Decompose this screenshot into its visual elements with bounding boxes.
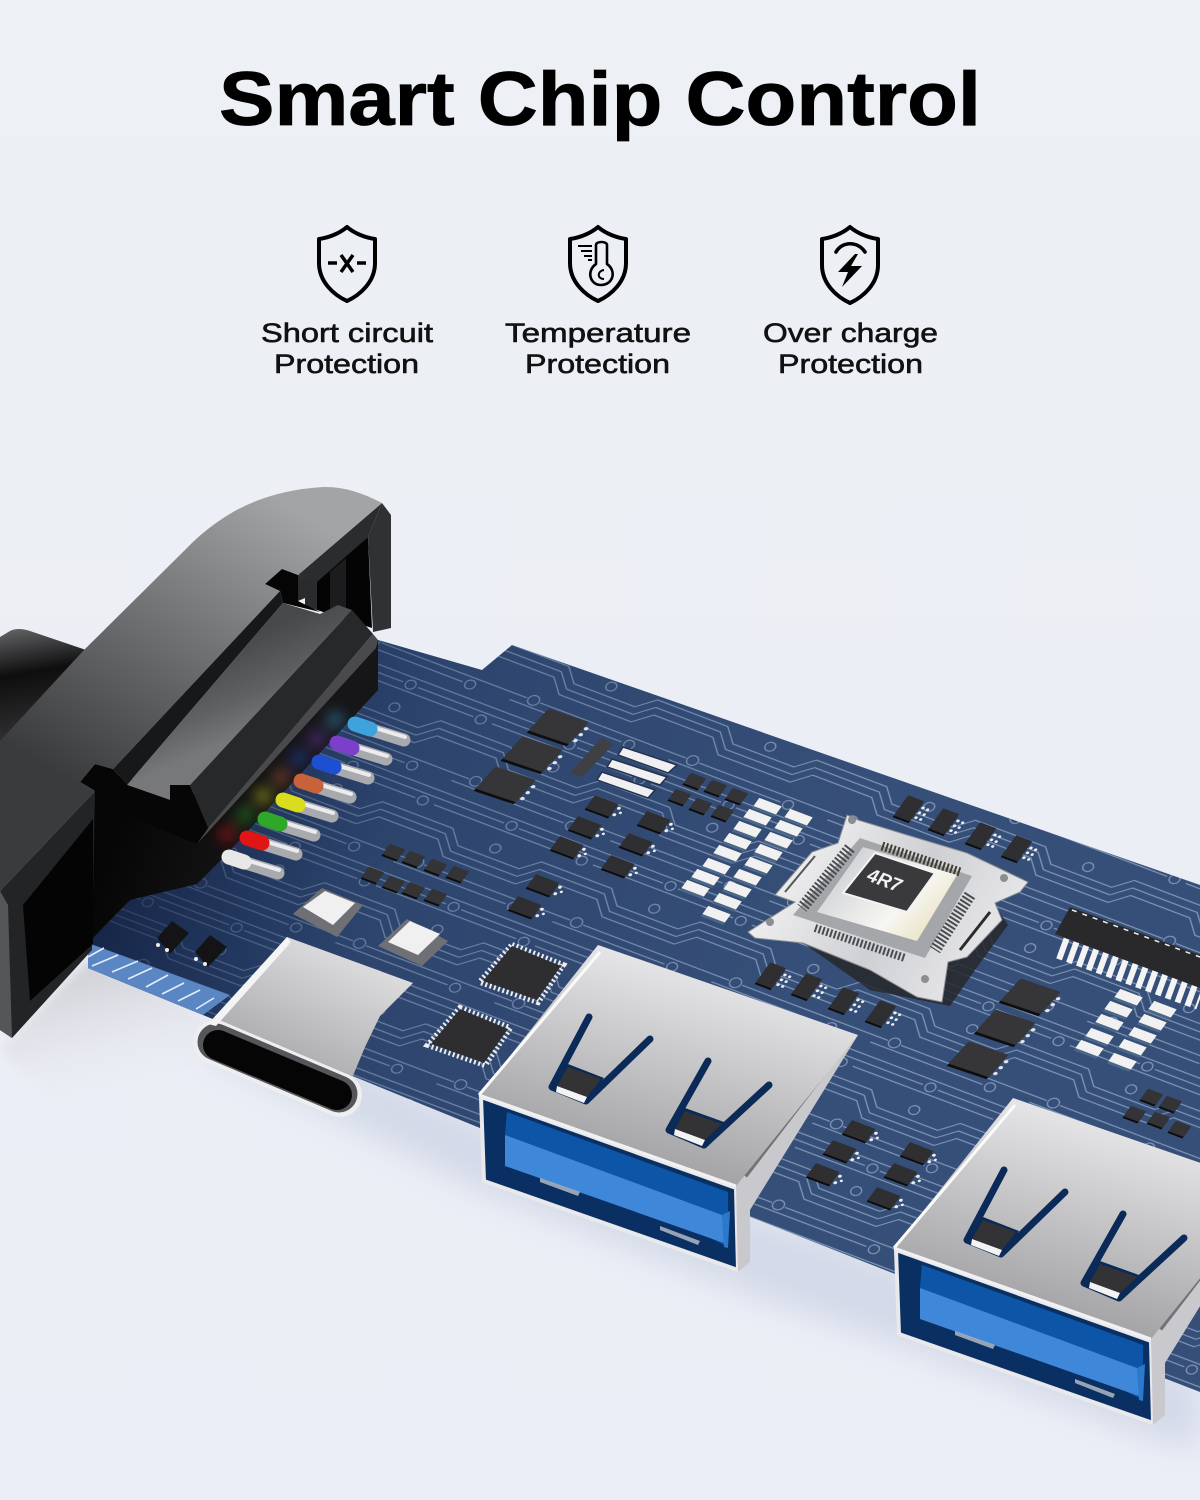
small component clusters bbox=[360, 773, 748, 923]
lower ICs between ports bbox=[806, 1089, 1191, 1214]
light board edge strip bbox=[88, 943, 230, 1015]
circuit board bbox=[88, 640, 1200, 1392]
label: short circuit: Short circuit bbox=[261, 318, 434, 348]
product illustration: USB hub internals bbox=[0, 487, 1200, 1450]
upper power ICs bbox=[474, 708, 593, 806]
resistor array: right bbox=[1074, 989, 1177, 1072]
crystal component 2 bbox=[378, 919, 448, 966]
feature: short circuit protection bbox=[261, 227, 434, 379]
light floor reflection below board bbox=[0, 960, 215, 1110]
crystal component 1 bbox=[293, 888, 363, 937]
main chip 4R7 bbox=[748, 815, 1028, 1006]
label: protection: Protection bbox=[274, 349, 419, 379]
feature: over charge protection bbox=[763, 227, 938, 379]
chip marking: 4R7 bbox=[863, 865, 905, 898]
DIP memory chip bbox=[1055, 907, 1200, 999]
USB-A port 1 bbox=[479, 945, 858, 1272]
resistor array: upper bbox=[680, 798, 813, 925]
power ICs right bbox=[947, 978, 1065, 1081]
black connector body bbox=[88, 640, 378, 943]
QFP chip upper bbox=[480, 945, 563, 1002]
USB-C port bbox=[208, 937, 413, 1095]
QFP chip lower bbox=[428, 1008, 510, 1065]
colour glow of pins bbox=[219, 712, 343, 842]
label: protection: Protection bbox=[525, 349, 670, 379]
left small ICs bbox=[156, 921, 227, 967]
cable stub bbox=[0, 629, 92, 750]
icon: shield with short circuit mark bbox=[319, 227, 375, 301]
white contact bars bbox=[597, 747, 677, 798]
label: temperature: Temperature bbox=[505, 318, 691, 348]
title: Smart Chip Control bbox=[219, 57, 981, 142]
coloured connector pins bbox=[229, 724, 405, 873]
ICs beside main chip bbox=[755, 795, 1041, 1031]
USB-A port 2 bbox=[894, 1098, 1200, 1425]
connector housing bbox=[0, 487, 391, 1038]
feature: temperature protection bbox=[505, 227, 691, 379]
soft shadow under hub bbox=[200, 1010, 1200, 1450]
label: protection: Protection bbox=[778, 349, 923, 379]
grey flat component bbox=[570, 737, 613, 777]
icon: shield with thermometer bbox=[570, 227, 626, 301]
label: over charge: Over charge bbox=[763, 318, 938, 348]
icon: shield with lightning bolt bbox=[822, 227, 878, 303]
